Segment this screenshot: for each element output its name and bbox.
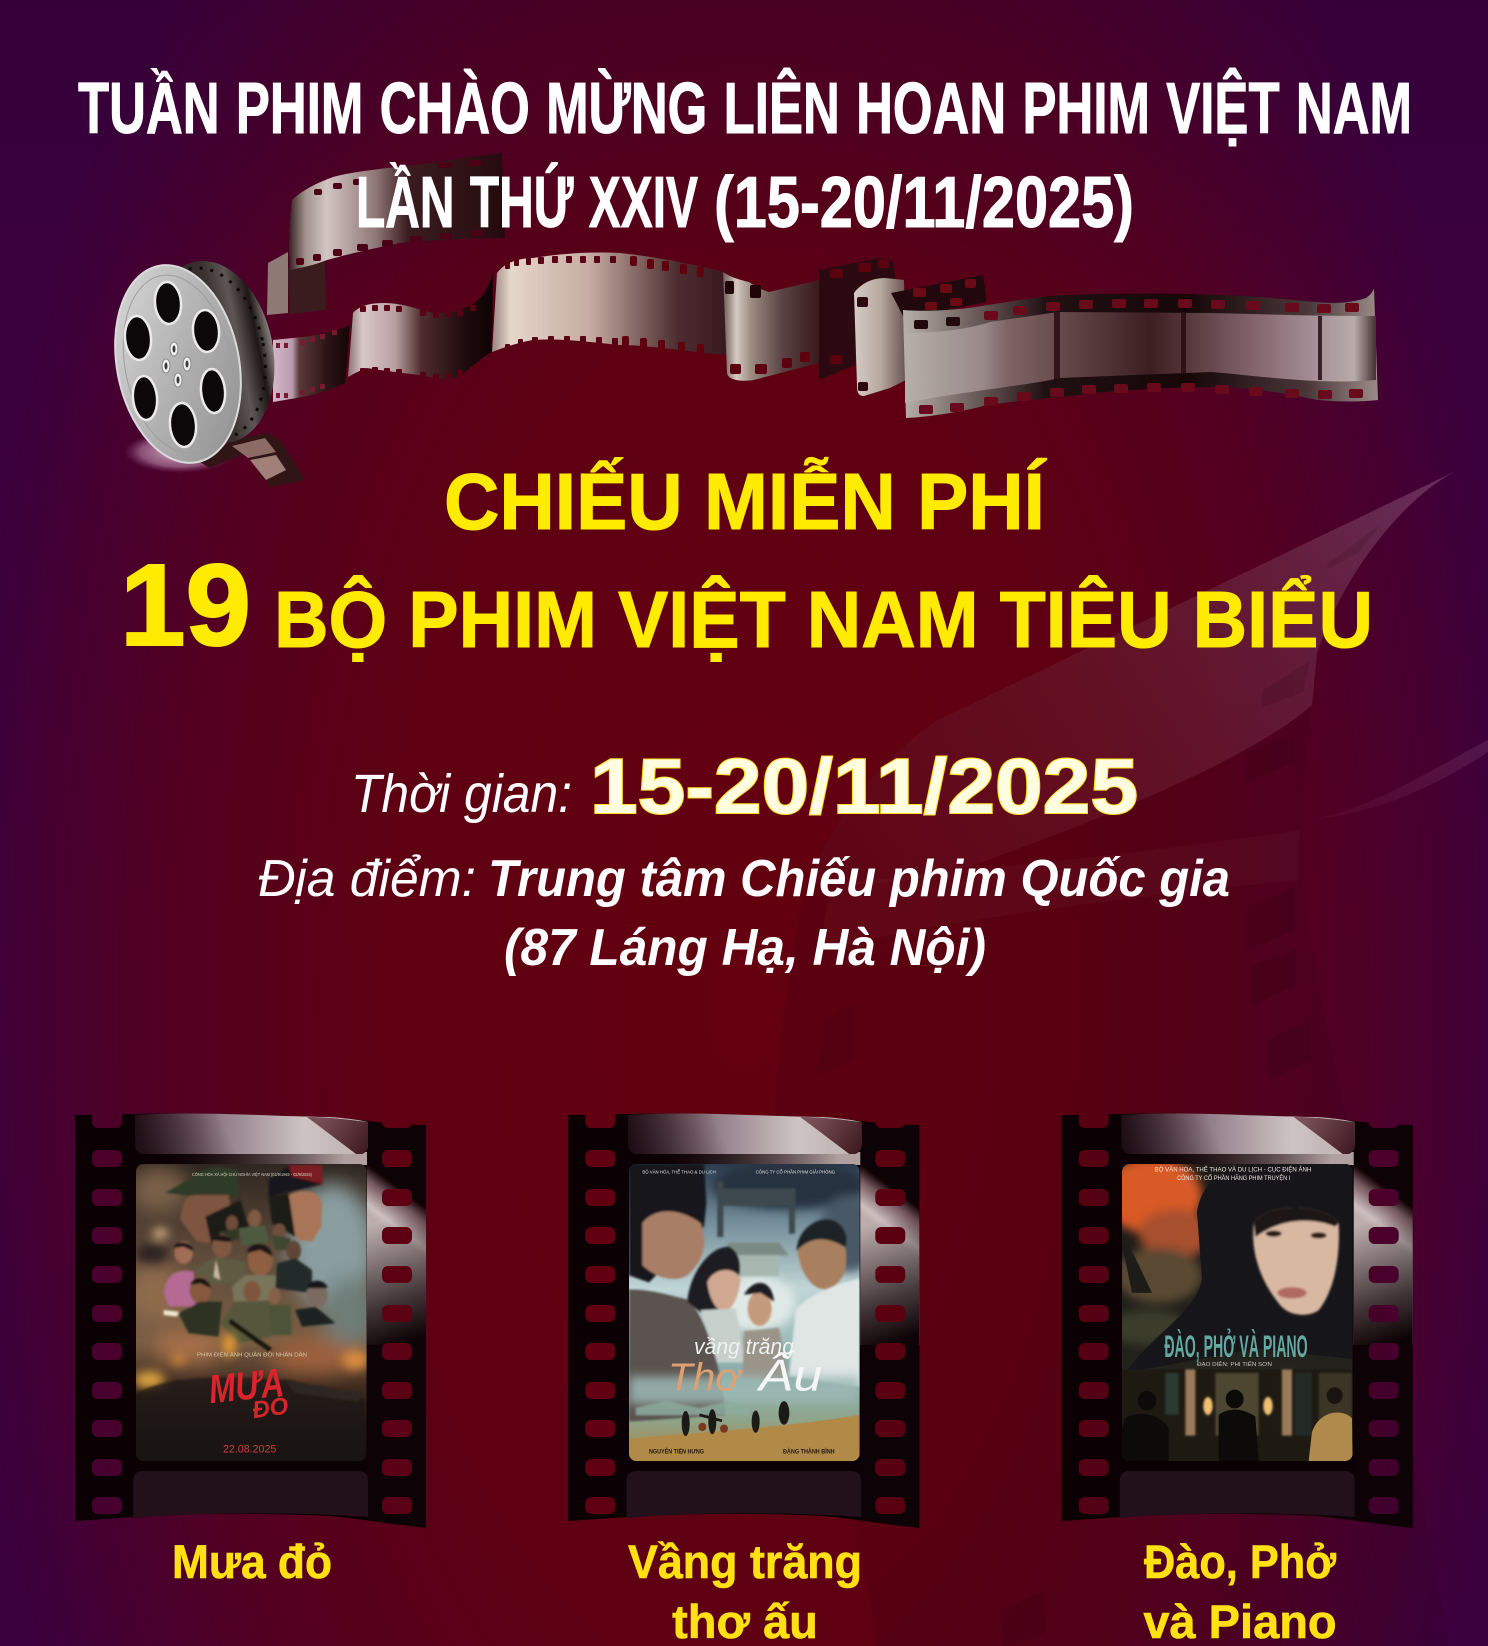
- time line: Thời gian:: [351, 764, 572, 824]
- poster: Vầng trăng thơ ấu: NGUYỄN TIẾN HƯNG: [649, 1449, 704, 1456]
- poster: Vầng trăng thơ ấu: vầng trăng: [694, 1333, 794, 1359]
- poster: Vầng trăng thơ ấu: Thơ: [668, 1356, 743, 1400]
- venue text: Trung tâm Chiếu phim Quốc gia: [488, 850, 1230, 908]
- film reel: [99, 250, 289, 474]
- label: Mưa đỏ: Mưa đỏ: [172, 1535, 332, 1588]
- film strip ribbon: [267, 153, 1378, 418]
- poster: Đào, Phở và Piano: [1122, 1164, 1352, 1461]
- poster: Mưa đỏ: ĐỎ: [251, 1391, 290, 1424]
- poster: Vầng trăng thơ ấu: BỘ VĂN HÓA, THỂ THAO & DU LỊCH: [642, 1169, 716, 1175]
- poster: Mưa đỏ: MƯA: [207, 1361, 286, 1412]
- poster: Đào, Phở và Piano: CÔNG TY CỔ PHẦN HÃNG PHIM TRUYỆN I: [1177, 1174, 1291, 1182]
- title: LẦN THỨ XXIV: [356, 162, 698, 243]
- headline: BỘ PHIM VIỆT NAM TIÊU BIỂU: [274, 575, 1373, 664]
- headline: [120, 457, 1373, 670]
- poster: Vầng trăng thơ ấu: Ấu: [755, 1349, 822, 1401]
- label: Vầng trăng thơ ấu: Vầng trăng: [628, 1535, 862, 1588]
- background ghost film strip: [774, 471, 1488, 1646]
- film strip and reel: [99, 153, 1378, 487]
- time line: 15-20/11/2025: [590, 742, 1138, 830]
- small film piece: [200, 433, 305, 487]
- headline: CHIẾU MIỄN PHÍ: [444, 457, 1047, 546]
- label: Đào, Phở và Piano: [1143, 1535, 1337, 1646]
- poster: Vầng trăng thơ ấu: CÔNG TY CỔ PHẦN PHIM GIẢI PHÓNG: [756, 1169, 836, 1175]
- time line: [351, 742, 1138, 830]
- poster: Mưa đỏ: CÔNG HÒA XÃ HỘI CHỦ NGHĨA VIỆT NAM (02/9/1945 - 02/9/2025): [192, 1170, 312, 1178]
- panel: film 3 Đào, Phở và Piano: [1062, 1113, 1413, 1646]
- headline: 19: [120, 540, 251, 670]
- poster: Mưa đỏ: PHIM ĐIỆN ẢNH QUÂN ĐỘI NHÂN DÂN: [197, 1351, 307, 1359]
- poster: Mưa đỏ: [125, 1164, 375, 1467]
- poster: Mưa đỏ: 22.08.2025: [223, 1444, 276, 1456]
- venue text: [258, 850, 1230, 977]
- poster: Vầng trăng thơ ấu: [629, 1161, 879, 1461]
- label: Vầng trăng thơ ấu: [628, 1535, 862, 1646]
- poster: Đào, Phở và Piano: ĐẠO DIỄN: PHI TIẾN SƠN: [1197, 1361, 1272, 1368]
- title: (15-20/11/2025): [714, 163, 1134, 243]
- panel: film 1 Mưa đỏ: [75, 1113, 426, 1588]
- label: Đào, Phở và Piano: Đào, Phở: [1144, 1535, 1337, 1588]
- reel glow: [124, 431, 236, 473]
- venue text: (87 Láng Hạ, Hà Nội): [504, 919, 986, 977]
- venue text: Địa điểm:: [258, 850, 476, 908]
- poster: Đào, Phở và Piano: ĐÀO, PHỞ VÀ PIANO: [1164, 1328, 1308, 1364]
- poster: Đào, Phở và Piano: BỘ VĂN HÓA, THỂ THAO VÀ DU LỊCH - CỤC ĐIỆN ẢNH: [1155, 1166, 1311, 1174]
- title: [78, 68, 1412, 243]
- panel: film 2 Vầng trăng thơ ấu: [568, 1113, 919, 1646]
- poster: Vầng trăng thơ ấu: ĐẶNG THÀNH BÌNH: [783, 1448, 835, 1456]
